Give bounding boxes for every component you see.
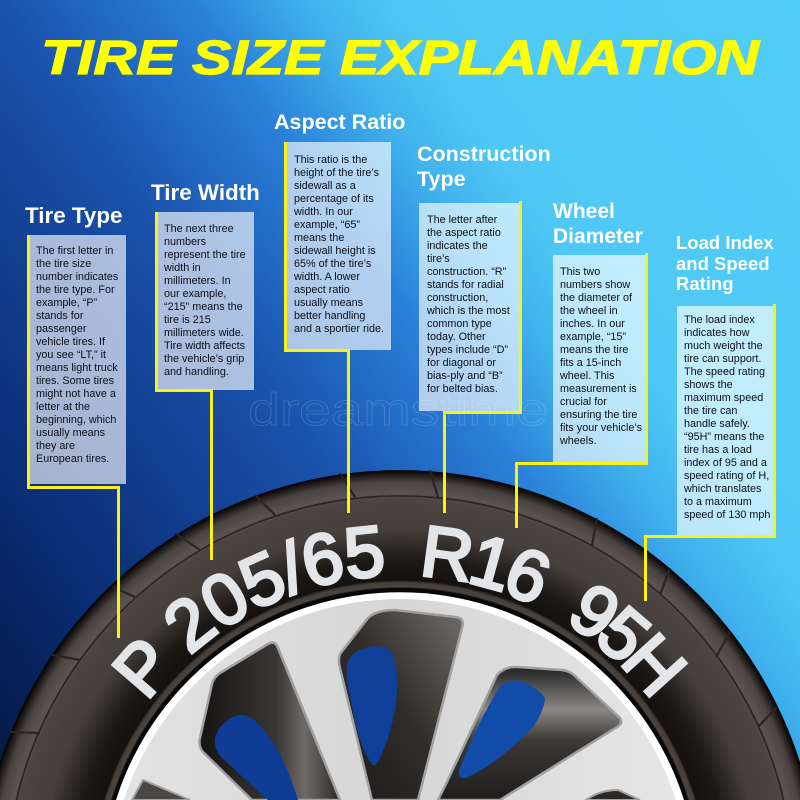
- text box: load index: shows the: [684, 379, 733, 391]
- text box: construction type: The letter after: [427, 214, 497, 226]
- text box: aspect ratio: width. A lower: [294, 271, 360, 283]
- text box: load index: indicates how: [684, 327, 749, 339]
- text box: tire width: represent the tire: [164, 249, 246, 261]
- text box: wheel diameter: fits your vehicle’s: [560, 422, 642, 434]
- text box: construction type: types include “D”: [427, 344, 508, 356]
- panel: wheel diameter: [515, 200, 648, 528]
- text box: aspect ratio: example, “65”: [294, 219, 360, 231]
- text box: tire type: number indicates: [36, 271, 118, 283]
- sidewall size marking: 205/65: [165, 524, 384, 656]
- wheel window left: [199, 643, 340, 800]
- connector: aspect ratio: [284, 142, 350, 513]
- text box: tire type: [27, 235, 126, 484]
- text box: construction type: bias-ply and “B”: [427, 370, 503, 382]
- text box: load index: which translates: [684, 483, 761, 495]
- text box: tire width: [155, 212, 254, 390]
- heading: wheel diameter: [553, 200, 643, 248]
- heading: wheel diameter: Wheel: [553, 200, 615, 223]
- title: TIRE SIZE EXPLANATION: [41, 32, 761, 85]
- text box: tire type: the tire type. For: [36, 284, 115, 296]
- text box: tire width: millimeters. In: [164, 275, 231, 287]
- text box: wheel diameter: fits a 15-inch: [560, 357, 621, 369]
- text box: aspect ratio: [284, 142, 391, 350]
- text box: aspect ratio: This ratio is the: [294, 154, 367, 166]
- text box: construction type: stands for radial: [427, 279, 504, 291]
- text box: tire width: The next three: [164, 223, 234, 235]
- text box: aspect ratio: 65% of the tire’s: [294, 258, 371, 270]
- wheel window middle: [339, 610, 463, 800]
- text box: tire type: The first letter in: [36, 245, 113, 257]
- text box: aspect ratio: width. In our: [294, 206, 353, 218]
- text box: load index: “95H” means the: [684, 431, 764, 443]
- panel: construction type: [417, 142, 551, 513]
- text box: aspect ratio: percentage of its: [294, 193, 374, 205]
- text box: wheel diameter: crucial for: [560, 396, 607, 408]
- text box: construction type: construction. “R”: [427, 266, 506, 278]
- text box: construction type: common type: [427, 318, 492, 330]
- text box: tire type: passenger: [36, 323, 86, 335]
- text box: wheel diameter: measurement is: [560, 383, 637, 395]
- text box: tire type: they are: [36, 440, 75, 452]
- text box: wheel diameter: numbers show: [560, 279, 630, 291]
- text box: load index: to a maximum: [684, 496, 752, 508]
- heading: tire width: Tire Width: [151, 180, 260, 205]
- text box: construction type: indicates the: [427, 240, 488, 252]
- text box: aspect ratio: means the: [294, 232, 344, 244]
- text box: wheel diameter: the diameter of: [560, 292, 632, 304]
- text box: load index: much weight the: [684, 340, 763, 352]
- text box: aspect ratio: better handling: [294, 310, 365, 322]
- text box: construction type: [419, 203, 520, 411]
- tire: [0, 470, 800, 800]
- panel: load index and speed rating: [644, 232, 776, 601]
- heading: load index and speed rating: Load Index: [676, 232, 774, 253]
- text box: wheel diameter: This two: [560, 266, 600, 278]
- wheel window lower right: [586, 790, 640, 800]
- text box: construction type: for diagonal or: [427, 357, 496, 369]
- text box: tire type: vehicle tires. If: [36, 336, 105, 348]
- tread groove ring: [16, 496, 784, 800]
- panel: tire width: [151, 180, 260, 560]
- text box: aspect ratio: and a sportier ride.: [294, 323, 384, 335]
- text box: load index: The speed rating: [684, 366, 765, 378]
- alloy wheel: [116, 592, 684, 800]
- text box: load index: handle safely.: [684, 418, 750, 430]
- text box: load index: the tire can: [684, 405, 737, 417]
- text box: tire type: you see “LT,” it: [36, 349, 106, 361]
- connector: wheel diameter: [515, 253, 648, 528]
- heading: tire type: Tire Type: [25, 203, 122, 228]
- text box: load index: maximum speed: [684, 392, 763, 404]
- heading: load index and speed rating: and Speed: [676, 252, 770, 274]
- text box: tire type: European tires.: [36, 453, 109, 465]
- text box: tire width: the vehicle’s grip: [164, 353, 244, 365]
- text box: aspect ratio: height of the tire’s: [294, 167, 379, 179]
- text box: tire type: stands for: [36, 310, 83, 322]
- text box: wheel diameter: inches. In our: [560, 318, 625, 330]
- text box: tire width: Tire width affects: [164, 340, 245, 352]
- text box: construction type: the aspect ratio: [427, 227, 501, 239]
- text box: load index: The load index: [684, 314, 755, 326]
- text box: wheel diameter: wheels.: [560, 435, 597, 447]
- watermark: dreamstime: [248, 384, 548, 435]
- text box: tire width: numbers: [164, 236, 206, 248]
- heading: load index and speed rating: Rating: [676, 273, 734, 294]
- heading: aspect ratio: Aspect Ratio: [274, 110, 405, 134]
- text box: wheel diameter: ensuring the tire: [560, 409, 637, 421]
- text box: load index: speed rating of H,: [684, 470, 769, 482]
- text box: wheel diameter: means the tire: [560, 344, 628, 356]
- text box: construction type: which is the most: [427, 305, 510, 317]
- text box: tire width: millimeters wide.: [164, 327, 244, 339]
- sidewall size marking: R16: [422, 524, 550, 602]
- wheel window lower left: [132, 780, 190, 800]
- text box: tire width: and handling.: [164, 366, 229, 378]
- panel: aspect ratio: [274, 110, 405, 513]
- text box: construction type: for belted bias.: [427, 383, 498, 395]
- text box: tire type: might not have a: [36, 388, 116, 400]
- text box: construction type: tire’s: [427, 253, 450, 265]
- heading: load index and speed rating: [676, 232, 774, 294]
- text box: tire width: width in: [164, 262, 201, 274]
- text box: aspect ratio: sidewall height is: [294, 245, 376, 257]
- text box: load index: tire can support.: [684, 353, 761, 365]
- text box: wheel diameter: example, “15”: [560, 331, 626, 343]
- text box: tire type: tires. Some tires: [36, 375, 114, 387]
- connector: tire type: [27, 235, 120, 638]
- text box: aspect ratio: sidewall as a: [294, 180, 356, 192]
- connector: load index: [644, 304, 776, 601]
- wheel window right: [438, 667, 621, 800]
- text box: wheel diameter: [553, 255, 647, 462]
- text box: wheel diameter: the wheel in: [560, 305, 618, 317]
- text box: tire type: means light truck: [36, 362, 118, 374]
- sidewall size marking: [110, 524, 688, 700]
- heading: construction type: [417, 142, 551, 191]
- heading: construction type: Construction: [417, 142, 551, 166]
- connector: construction type: [443, 201, 522, 513]
- text box: tire type: example, “P”: [36, 297, 97, 309]
- text box: tire type: the tire size: [36, 258, 91, 270]
- text box: load index: tire has a load: [684, 444, 752, 456]
- text box: tire width: tire is 215: [164, 314, 211, 326]
- text box: wheel diameter: wheel. This: [560, 370, 614, 382]
- text box: aspect ratio: aspect ratio: [294, 284, 350, 296]
- text box: tire width: “215” means the: [164, 301, 243, 313]
- tread block lines: [10, 470, 777, 733]
- text box: construction type: today. Other: [427, 331, 486, 343]
- heading: construction type: Type: [417, 167, 466, 191]
- text box: aspect ratio: usually means: [294, 297, 363, 309]
- text box: construction type: construction,: [427, 292, 488, 304]
- text box: load index: index of 95 and a: [684, 457, 767, 469]
- text box: tire type: beginning, which: [36, 414, 116, 426]
- connector: tire width: [155, 212, 213, 560]
- text box: load index: [677, 306, 775, 538]
- text box: tire type: letter at the: [36, 401, 90, 413]
- panel: tire type: [25, 203, 126, 638]
- text box: tire width: our example,: [164, 288, 226, 300]
- text box: load index: speed of 130 mph: [684, 509, 770, 521]
- sidewall size marking: 95H: [570, 586, 688, 698]
- text box: tire type: usually means: [36, 427, 105, 439]
- heading: wheel diameter: Diameter: [553, 225, 643, 248]
- sidewall size marking: P: [110, 640, 157, 700]
